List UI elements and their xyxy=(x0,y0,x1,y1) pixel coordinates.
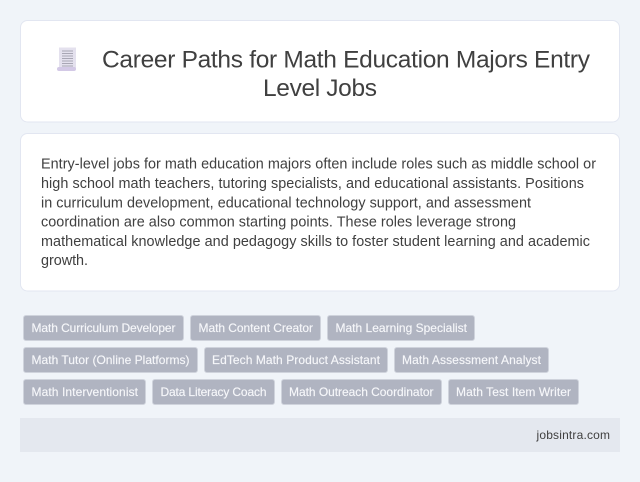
text block: description: growth. xyxy=(41,253,88,269)
text block: description: in curriculum development, educational technology support, and assessment xyxy=(41,196,531,212)
tag: Math Outreach Coordinator xyxy=(289,385,434,399)
text block: description: coordination are also common starting points. These roles leverage strong xyxy=(41,214,516,230)
tag: Math Learning Specialist xyxy=(336,321,468,335)
text block: description: Entry-level jobs for math education majors often include roles such as middle school or xyxy=(41,156,596,172)
tag xyxy=(448,380,578,404)
icon: document scroll xyxy=(57,48,76,71)
panel: header xyxy=(20,20,620,122)
tag xyxy=(204,348,388,372)
panel: description xyxy=(20,134,620,291)
tag xyxy=(394,348,548,372)
text block: description: mathematical knowledge and pedagogy skills to foster student learning and academic xyxy=(41,234,590,250)
tag xyxy=(24,348,198,372)
tag: Math Interventionist xyxy=(32,385,139,399)
tag xyxy=(24,316,184,340)
tag: Data Literacy Coach xyxy=(160,385,266,399)
tag: Math Assessment Analyst xyxy=(402,353,542,367)
tag xyxy=(282,380,442,404)
tag xyxy=(24,380,146,404)
tag xyxy=(328,316,474,340)
tag xyxy=(190,316,320,340)
title: Level Jobs xyxy=(263,75,377,102)
tag xyxy=(152,380,274,404)
footer: jobsintra.com xyxy=(536,428,610,442)
tag: EdTech Math Product Assistant xyxy=(212,353,381,367)
tag: Math Test Item Writer xyxy=(456,385,571,399)
tag: Math Content Creator xyxy=(198,321,313,335)
tags: job roles xyxy=(24,316,578,404)
text block: description xyxy=(41,156,596,269)
title xyxy=(102,46,591,102)
tag: Math Tutor (Online Platforms) xyxy=(32,353,190,367)
tag: Math Curriculum Developer xyxy=(32,321,176,335)
title: Career Paths for Math Education Majors Entry xyxy=(102,46,591,74)
text block: description: high school math teachers, tutoring specialists, and educational assistants. Positions xyxy=(41,176,584,192)
footer xyxy=(20,418,620,452)
